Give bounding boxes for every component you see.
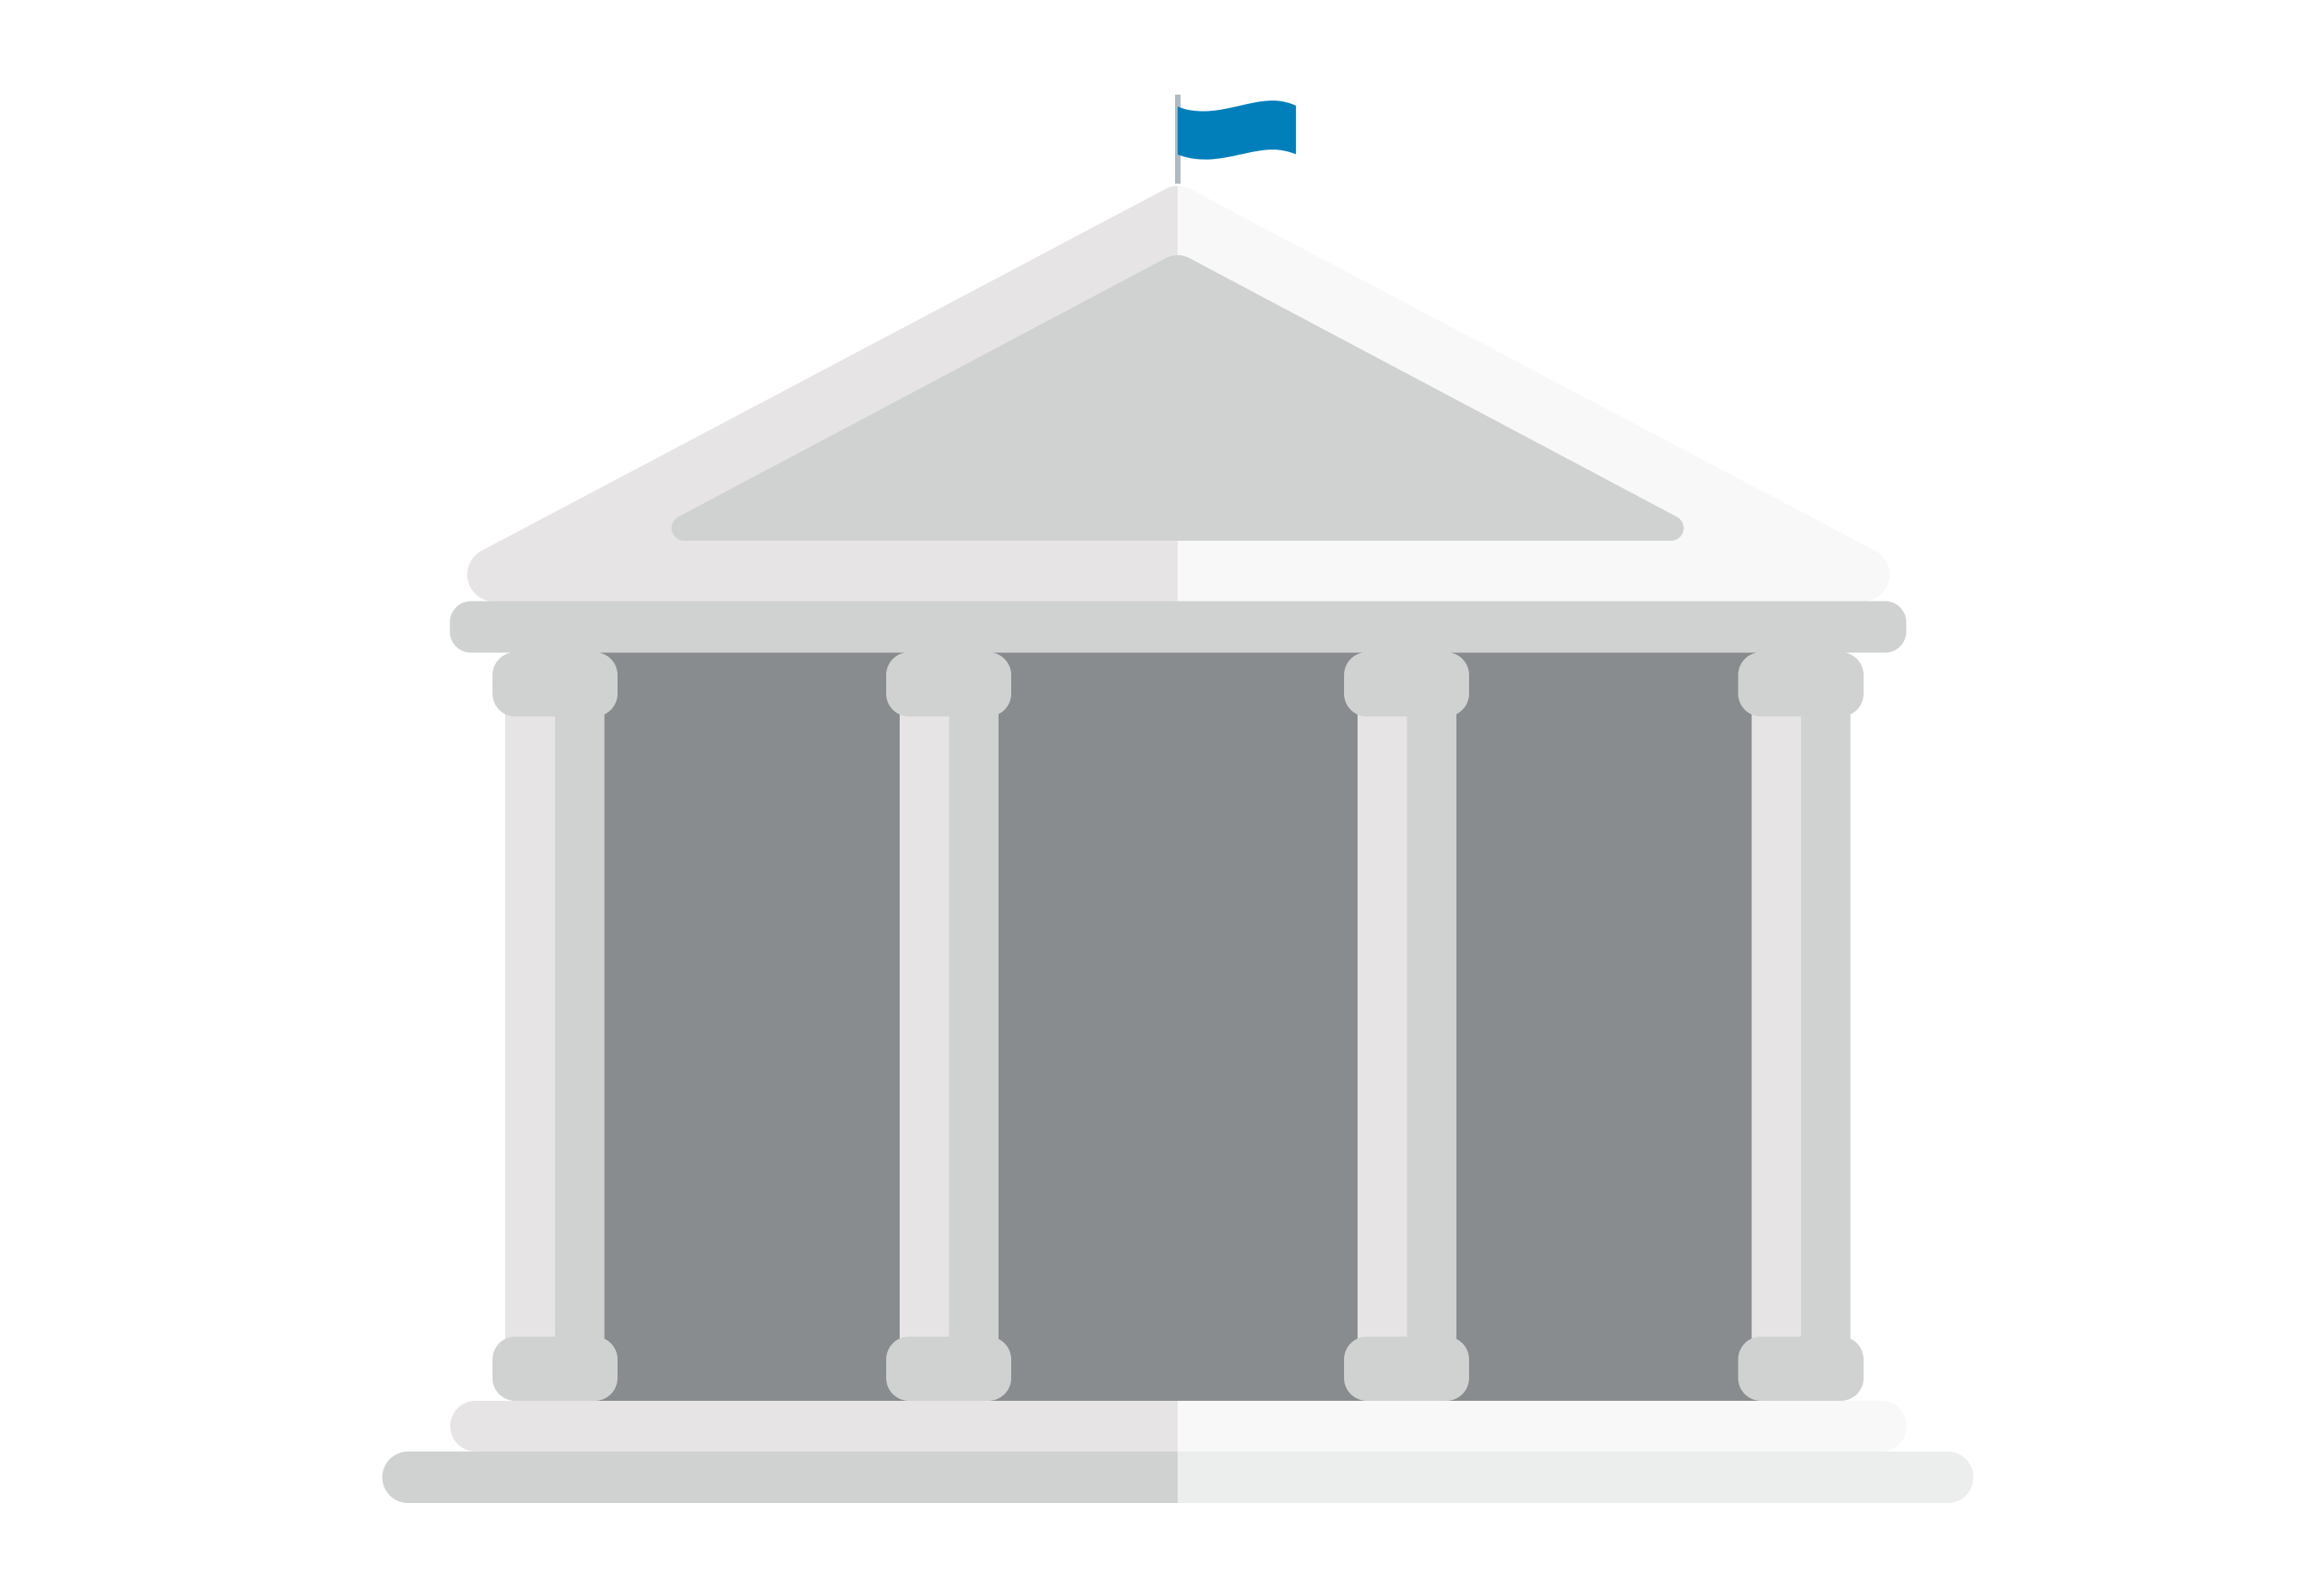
flag: [1175, 95, 1296, 184]
shaft light side: [1358, 710, 1407, 1343]
shaft dark side: [950, 710, 999, 1343]
roof pediment: [467, 186, 1890, 602]
shaft light side: [505, 710, 555, 1343]
lower step right half: [1178, 1452, 1973, 1503]
base: [493, 1337, 618, 1401]
entablature band: [449, 602, 1906, 652]
back wall: [558, 652, 1799, 1401]
shaft dark side: [1407, 710, 1456, 1343]
roof left half: [467, 186, 1178, 602]
shaft dark side: [1801, 710, 1850, 1343]
shaft dark side: [555, 710, 605, 1343]
shaft light side: [1752, 710, 1801, 1343]
upper step right half: [1178, 1401, 1907, 1452]
column 1: [493, 652, 618, 1401]
roof right half: [1178, 186, 1890, 602]
column 2: [886, 652, 1011, 1401]
upper step left half: [450, 1401, 1178, 1452]
column 3: [1344, 652, 1469, 1401]
base: [1344, 1337, 1469, 1401]
inner tympanum triangle: [672, 255, 1684, 541]
flag cloth: [1178, 101, 1296, 160]
column 4: [1739, 652, 1864, 1401]
capital: [1739, 652, 1864, 716]
capital: [1344, 652, 1469, 716]
flag pole: [1175, 95, 1181, 184]
capital: [886, 652, 1011, 716]
lower step: [382, 1452, 1973, 1503]
shaft light side: [900, 710, 950, 1343]
lower step left half: [382, 1452, 1178, 1503]
base: [1739, 1337, 1864, 1401]
base: [886, 1337, 1011, 1401]
upper step: [450, 1401, 1907, 1452]
capital: [493, 652, 618, 716]
